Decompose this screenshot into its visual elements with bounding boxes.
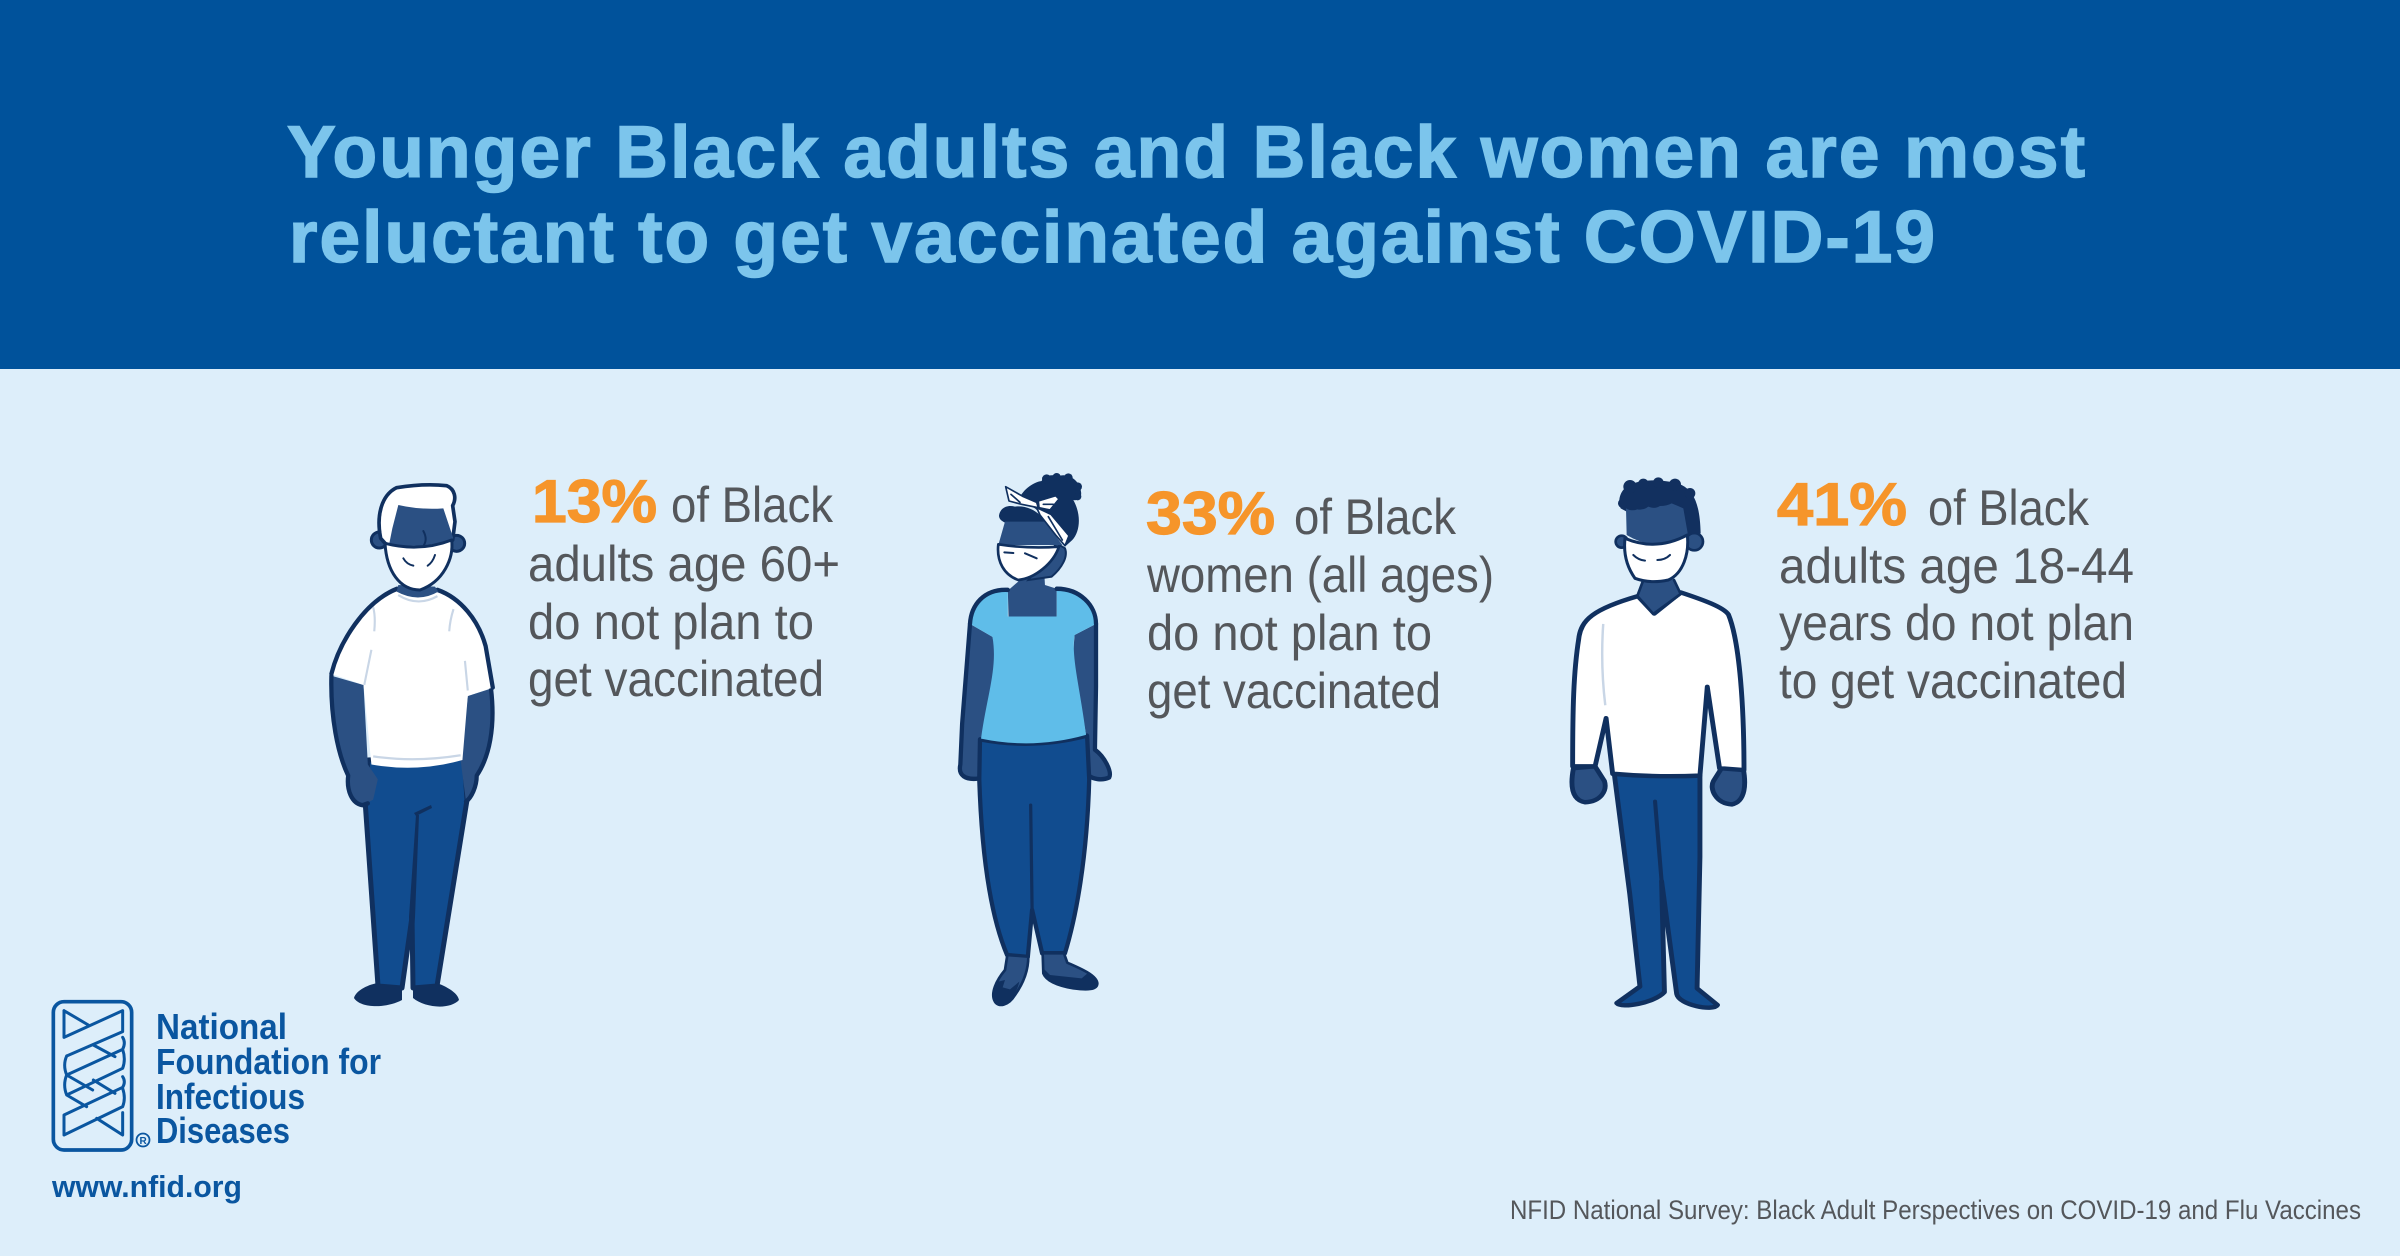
logo mark: DNA helix	[53, 1002, 132, 1150]
statistic: 13% of Black adults age 60+: of Black	[671, 477, 834, 533]
figure: older man in white t-shirt	[331, 485, 493, 1007]
logo wordmark: R	[140, 1136, 148, 1147]
website url: www.nfid.org	[51, 1169, 242, 1204]
statistic: 13% of Black adults age 60+	[528, 468, 840, 707]
logo wordmark: Foundation for	[156, 1041, 381, 1082]
logo wordmark	[136, 1006, 381, 1151]
title: reluctant to get vaccinated against COVID-19	[289, 197, 1935, 278]
figure: woman with headband and light blue top	[960, 473, 1110, 1006]
statistic: 41% of Black adults age 18-44	[1777, 471, 2134, 709]
statistic: 13% of Black adults age 60+: do not plan to	[528, 594, 814, 650]
title	[287, 112, 2085, 278]
statistic: 33% of Black women (all ages): get vaccinated	[1147, 663, 1441, 719]
logo wordmark: Diseases	[156, 1110, 290, 1151]
statistic: 33% of Black women (all ages): do not plan to	[1147, 605, 1432, 661]
statistic: 13% of Black adults age 60+: get vaccinated	[528, 651, 824, 707]
statistic: 13% of Black adults age 60+: 13%	[532, 468, 657, 535]
statistic: 41% of Black adults age 18-44: of Black	[1928, 480, 2090, 536]
NFID logo	[53, 1002, 381, 1151]
statistic: 33% of Black women (all ages): 33%	[1146, 480, 1275, 547]
statistic: 41% of Black adults age 18-44: adults age 18-44	[1779, 538, 2134, 594]
header banner	[0, 0, 2400, 369]
statistic: 33% of Black women (all ages)	[1146, 480, 1494, 719]
statistic: 41% of Black adults age 18-44: 41%	[1777, 471, 1907, 538]
statistic: 41% of Black adults age 18-44: to get vaccinated	[1779, 653, 2127, 709]
statistic: 33% of Black women (all ages): of Black	[1294, 489, 1457, 545]
logo wordmark: National	[156, 1006, 287, 1047]
figure: younger man in white long-sleeve sweater	[1572, 477, 1745, 1008]
statistic: 33% of Black women (all ages): women (all ages)	[1146, 547, 1494, 603]
statistic: 41% of Black adults age 18-44: years do not plan	[1779, 595, 2134, 651]
title: Younger Black adults and Black women are most	[287, 112, 2085, 193]
statistic: 13% of Black adults age 60+: adults age 60+	[528, 536, 840, 592]
logo wordmark: Infectious	[156, 1076, 305, 1117]
